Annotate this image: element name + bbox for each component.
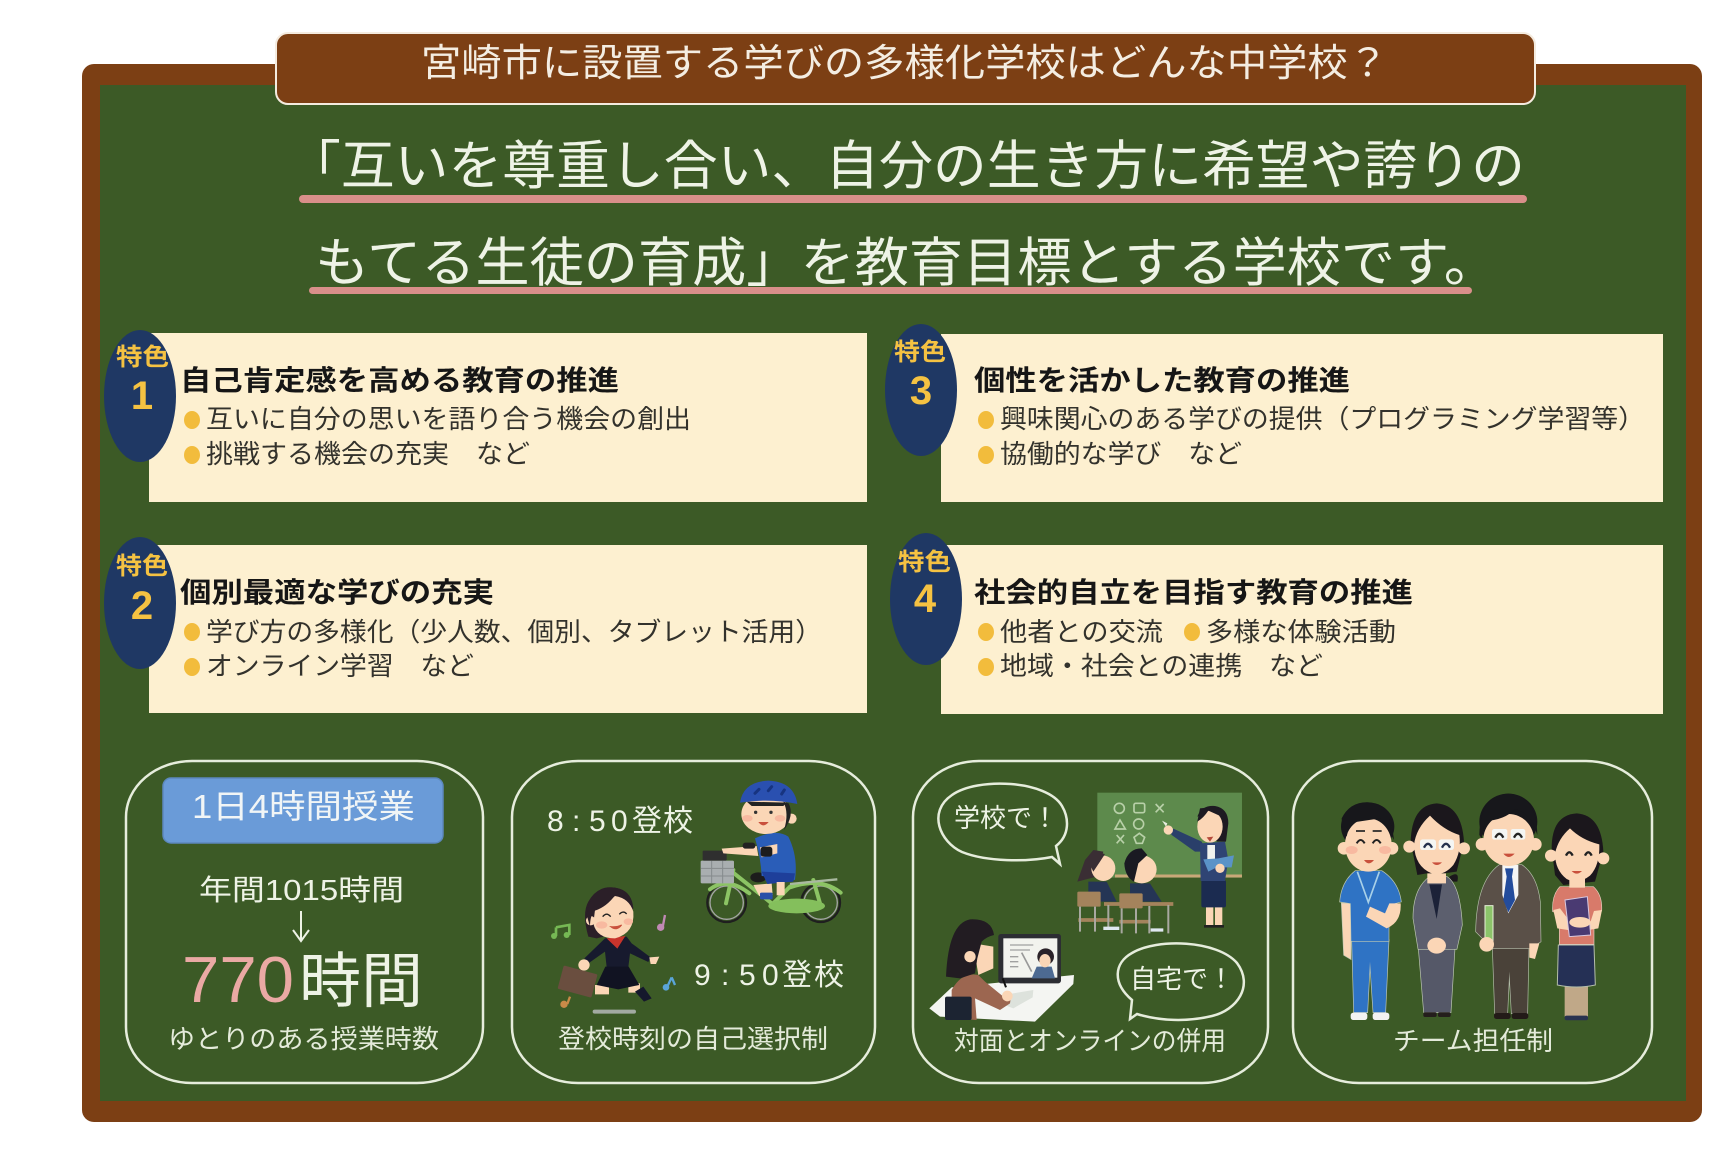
- panel: feature 3: 3: [910, 369, 932, 413]
- panel: feature 4: 他者との交流: [1000, 617, 1163, 647]
- panel: feature 2: 学び方の多様化（少人数、個別、タブレット活用）: [206, 617, 822, 647]
- icon: boy riding bicycle: [701, 781, 841, 922]
- panel: feature 3: 個性を活かした教育の推進: [974, 365, 1350, 396]
- heading: educational goal: [287, 137, 1527, 294]
- panel: in-person and online: 対面とオンラインの併用: [954, 1026, 1226, 1056]
- panel: team homeroom system: [1293, 761, 1652, 1083]
- icon: teachers right pair: [1476, 794, 1609, 1020]
- panel: feature 1: 1: [131, 374, 153, 418]
- panel: feature 1: [104, 330, 867, 502]
- icon: classroom with teacher: [1077, 793, 1242, 933]
- callout: at school: [938, 784, 1067, 864]
- panel: feature 4: [890, 533, 1663, 714]
- panel: self-selected arrival time: 8:50登校: [547, 805, 693, 838]
- callout: at home: [1118, 943, 1244, 1020]
- panel: feature 4: 地域・社会との連携 など: [1000, 651, 1323, 681]
- panel: feature 2: [104, 537, 867, 713]
- panel: in-person and online: [913, 761, 1268, 1083]
- panel: feature 3: 協働的な学び など: [1000, 439, 1242, 469]
- panel: feature 2: 個別最適な学びの充実: [180, 577, 494, 608]
- icon: girl walking with music notes: [551, 887, 675, 1014]
- icon: teachers left pair: [1338, 802, 1470, 1020]
- icon: student at tablet: [929, 919, 1074, 1022]
- panel: feature 4: 特色: [898, 549, 951, 576]
- panel: feature 2: 特色: [116, 553, 168, 580]
- panel: feature 4: 4: [914, 577, 937, 621]
- panel: 4-hour school day: 1日4時間授業: [192, 788, 415, 825]
- title banner: [276, 33, 1535, 104]
- panel: feature 1: 自己肯定感を高める教育の推進: [180, 365, 619, 396]
- panel: feature 4: 多様な体験活動: [1206, 617, 1396, 647]
- panel: feature 2: オンライン学習 など: [206, 651, 474, 681]
- panel: feature 1: 挑戦する機会の充実 など: [206, 439, 530, 469]
- panel: feature 1: 互いに自分の思いを語り合う機会の創出: [206, 404, 691, 434]
- panel: 4-hour school day: 時間: [299, 948, 423, 1015]
- callout: at home: 自宅で！: [1130, 964, 1234, 994]
- panel: team homeroom system: チーム担任制: [1393, 1026, 1553, 1056]
- panel: self-selected arrival time: 9:50登校: [694, 959, 844, 992]
- panel: feature 4: 社会的自立を目指す教育の推進: [974, 577, 1413, 608]
- panel: feature 3: 興味関心のある学びの提供（プログラミング学習等）: [1000, 404, 1645, 434]
- title banner: 宮崎市に設置する学びの多様化学校はどんな中学校？: [421, 43, 1388, 85]
- panel: feature 2: 2: [131, 584, 153, 628]
- panel: 4-hour school day: ゆとりのある授業時数: [168, 1024, 439, 1054]
- panel: self-selected arrival time: [512, 761, 875, 1083]
- panel: feature 1: 特色: [116, 344, 169, 371]
- heading: educational goal: もてる生徒の育成」を教育目標とする学校です。: [315, 234, 1498, 293]
- panel: 4-hour school day: [126, 761, 483, 1083]
- panel: 4-hour school day: 年間1015時間: [199, 874, 404, 907]
- panel: 4-hour school day: 770: [182, 943, 294, 1016]
- panel: feature 3: [885, 324, 1663, 502]
- heading: educational goal: 「互いを尊重し合い、自分の生き方に希望や誇りの: [287, 137, 1525, 196]
- panel: self-selected arrival time: 登校時刻の自己選択制: [558, 1024, 828, 1054]
- panel: feature 3: 特色: [894, 339, 946, 366]
- callout: at school: 学校で！: [954, 803, 1058, 833]
